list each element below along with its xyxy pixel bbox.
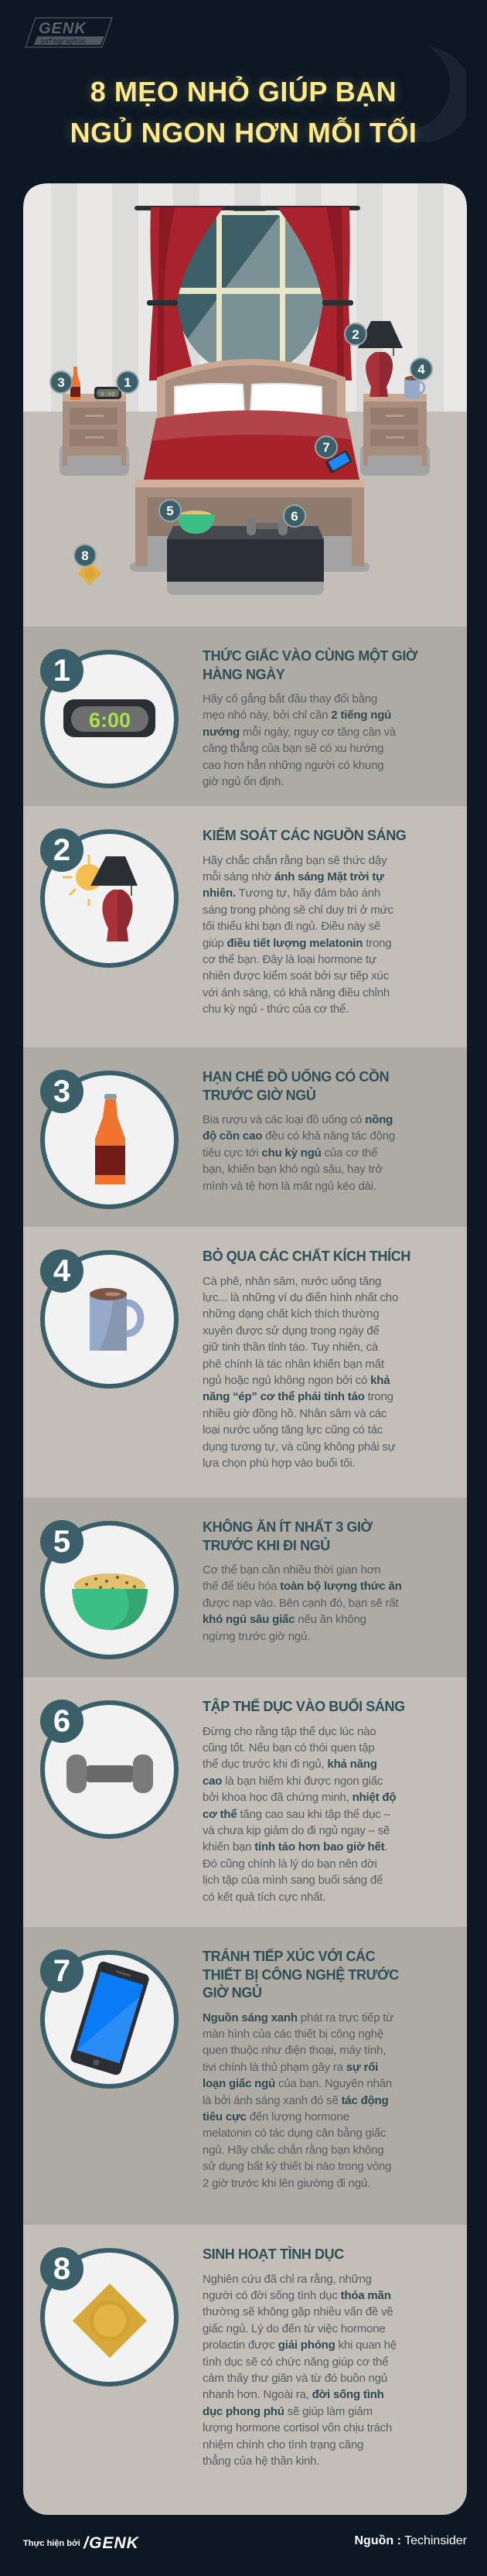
text: tip 7: tiêu cực đến lượng hormone bbox=[203, 2110, 349, 2123]
text: tip 2: chu kỳ ngủ - thức của cơ thể. bbox=[203, 1003, 349, 1016]
text: tip 7: melatonin có tác dụng cân bằng giấc bbox=[203, 2127, 386, 2140]
text: tip 2: nhiên. Tương tự, hãy đảm bảo ánh bbox=[203, 887, 380, 900]
text: tip 8: nhanh hơn. Ngoài ra, đời sống tình bbox=[203, 2388, 384, 2401]
icon: lamp bbox=[358, 321, 403, 397]
text: tip 5: TRƯỚC KHI ĐI NGỦ bbox=[203, 1538, 330, 1553]
text: tip 2: KIỂM SOÁT CÁC NGUỒN SÁNG bbox=[203, 828, 406, 843]
text: tip 4: nhiều giờ đồng hồ. Nhân sâm và các bbox=[203, 1407, 387, 1420]
text: tip 4: BỎ QUA CÁC CHẤT KÍCH THÍCH bbox=[203, 1249, 410, 1264]
icon: sun and lamp bbox=[40, 829, 179, 968]
number markers: 1 bbox=[124, 375, 131, 390]
text: tip 8: giấc ngủ. Lý do đến từ việc hormone bbox=[203, 2322, 386, 2335]
text: tip 5: KHÔNG ĂN ÍT NHẤT 3 GIỜ bbox=[203, 1519, 373, 1535]
logo: GENK infographic: GENK bbox=[39, 20, 87, 37]
text: tip 2: mỗi sáng nhờ ánh sáng Mặt trời tự bbox=[203, 870, 384, 883]
window bbox=[177, 210, 323, 363]
text: tip 8: thẳng của hệ thần kinh. bbox=[203, 2455, 319, 2468]
text: tip 7: TRÁNH TIẾP XÚC VỚI CÁC bbox=[203, 1949, 375, 1964]
panel: tip 1 bbox=[23, 627, 467, 806]
text: tip 7: là bởi ánh sáng xanh đó sẽ tác động bbox=[203, 2094, 388, 2107]
text: tip 7: tivi chính là thủ phạm gây ra sự rối bbox=[203, 2061, 378, 2074]
text: tip 6: Đó cũng chính là lý do bạn nên dời bbox=[203, 1857, 377, 1871]
footer: credit: Thực hiện bởi /GENK bbox=[23, 2534, 139, 2552]
text: tip 4: năng “ép” cơ thể phải tỉnh táo trong bbox=[203, 1390, 393, 1403]
icon: coffee mug bbox=[40, 1250, 179, 1389]
badge 7: 7 bbox=[53, 1954, 70, 1988]
text: tip 1: giờ ngủ ổn định. bbox=[203, 775, 284, 788]
number markers: 8 bbox=[81, 548, 89, 563]
text: tip 7: màn hình của các thiết bị công nghệ bbox=[203, 2028, 383, 2041]
text: tip 5: Cơ thể bạn cần nhiều thời gian hơn bbox=[203, 1563, 380, 1577]
text: tip 5: ngừng trước giờ ngủ. bbox=[203, 1630, 310, 1643]
text: tip 4: giữ tinh thần tỉnh táo. Tuy nhiên, cà bbox=[203, 1341, 378, 1354]
number markers: 2 bbox=[352, 327, 359, 342]
icon: phone small bbox=[325, 450, 352, 473]
title: NGỦ NGON HƠN MỖI TỐI bbox=[70, 117, 417, 149]
text: tip 1: căng thẳng của bạn sẽ có xu hướng bbox=[203, 742, 383, 755]
text: tip 1: Hãy cố gắng bắt đầu thay đổi bằng bbox=[203, 692, 377, 705]
text: tip 7: ngủ. Hãy chắc chắn rằng bạn không bbox=[203, 2144, 383, 2157]
icon: bottle small bbox=[70, 367, 80, 400]
icon: bottle bbox=[40, 1071, 179, 1209]
badge 5: 5 bbox=[53, 1525, 70, 1559]
panel: tip 5 bbox=[23, 1498, 467, 1677]
logo: GENK infographic: infographic bbox=[40, 38, 86, 46]
title: 8 MẸO NHỎ GIÚP BẠN bbox=[90, 76, 397, 108]
badge 6: 6 bbox=[53, 1704, 70, 1738]
text: tip 4: loại nước uống tăng lực cũng có tác bbox=[203, 1423, 383, 1437]
text: tip 3: TRƯỚC GIỜ NGỦ bbox=[203, 1088, 315, 1103]
bench bbox=[167, 526, 324, 595]
icon: mug small bbox=[404, 376, 424, 398]
badge 1: 1 bbox=[53, 654, 70, 688]
panel: tip 8 bbox=[23, 2225, 467, 2515]
text: tip 6: lịch tập của mình sang buổi sáng để bbox=[203, 1874, 383, 1887]
text: tip 8: dục phong phú sẽ giúp làm giảm bbox=[203, 2405, 373, 2418]
panel: tip 3 bbox=[23, 1047, 467, 1227]
panel: tip 7 bbox=[23, 1927, 467, 2225]
text: tip 8: thường sẽ không gặp nhiều vấn đề về bbox=[203, 2305, 393, 2318]
logo: GENK infographic bbox=[25, 17, 113, 48]
text: tip 8 bbox=[203, 2246, 397, 2468]
text: tip 6: và chưa kịp giảm do đi ngủ ngay – sẽ bbox=[203, 1824, 390, 1837]
text: tip 1: cao hơn hẳn những người có khung bbox=[203, 759, 383, 772]
text: tip 1: HÀNG NGÀY bbox=[203, 667, 284, 682]
icon: alarm clock 6:00 bbox=[40, 650, 179, 788]
text: tip 2: cơ thể bạn. Đây là loại hormone tự bbox=[203, 953, 376, 966]
text: tip 6: cơ thể tăng cao sau khi tập thể dục – bbox=[203, 1808, 390, 1821]
text: tip 6: cao là bạn hiếm khi được ngon giấc bbox=[203, 1775, 383, 1788]
text: tip 2: sáng trong phòng sẽ chỉ duy trì ở mức bbox=[203, 904, 393, 917]
text: tip 7: 2 giờ trước khi lên giường đi ngủ. bbox=[203, 2177, 370, 2190]
bed bbox=[130, 359, 370, 572]
icon: dumbbell bbox=[40, 1700, 179, 1839]
curtains bbox=[135, 206, 360, 381]
badge 5 bbox=[40, 1520, 83, 1563]
illustration: bedroom scene bbox=[23, 183, 467, 627]
badge 8 bbox=[40, 2247, 83, 2291]
text: tip 6: cũng tốt. Nếu bạn có thói quen tập bbox=[203, 1741, 375, 1754]
text: tip 1: mẹo nhỏ này, bởi chỉ cần 2 tiếng ngủ bbox=[203, 709, 391, 722]
text: tip 4: lực... là những ví dụ điển hình nhất cho bbox=[203, 1291, 398, 1304]
nightstand right bbox=[360, 394, 430, 476]
text: tip 6: có kết quả tích cực nhất. bbox=[203, 1891, 325, 1904]
text: tip 2: nhiên được kiểm soát bởi sự tiếp xúc bbox=[203, 969, 389, 982]
text: tip 3 bbox=[203, 1068, 395, 1193]
text: tip 6: khiến bạn tỉnh táo hơn bao giờ hết. bbox=[203, 1840, 387, 1853]
text: tip 8: lượng hormone cortisol vốn chịu trách bbox=[203, 2421, 392, 2434]
text: tip 8: cảm thấy thư giãn và từ đó buồn ngủ bbox=[203, 2372, 387, 2385]
text: tip 3: độ cồn cao đều có khả năng tác động bbox=[203, 1129, 395, 1143]
text: tip 3: tiêu cực tới chu kỳ ngủ của cơ thể bbox=[203, 1146, 377, 1160]
icon: crescent moon bbox=[393, 46, 466, 142]
text: tip 4: những dạng chất kích thích thường bbox=[203, 1307, 379, 1320]
text: tip 8: người có đời sống tình dục thỏa mãn bbox=[203, 2289, 391, 2302]
icon: smartphone bbox=[40, 1950, 179, 2089]
badge 4: 4 bbox=[53, 1254, 70, 1288]
badge 8: 8 bbox=[53, 2252, 70, 2286]
icon: alarm clock small: 9:00 bbox=[100, 391, 115, 398]
text: tip 6: TẬP THỂ DỤC VÀO BUỔI SÁNG bbox=[203, 1699, 405, 1714]
text: tip 2: Hãy chắc chắn rằng bạn sẽ thức dậy bbox=[203, 854, 387, 866]
text: tip 1: THỨC GIẤC VÀO CÙNG MỘT GIỜ bbox=[203, 648, 417, 664]
text: tip 4: lựa chọn phù hợp vào buổi tối. bbox=[203, 1457, 355, 1470]
text: tip 3: HẠN CHẾ ĐỒ UỐNG CÓ CỒN bbox=[203, 1069, 389, 1085]
panel: tip 4 bbox=[23, 1227, 467, 1498]
text: tip 1 bbox=[203, 647, 417, 788]
text: tip 5: khó ngủ sâu giấc nếu ăn không bbox=[203, 1613, 366, 1626]
text: tip 4: dụng tương tự, và cũng không phải sự bbox=[203, 1440, 396, 1454]
badge 2 bbox=[40, 828, 83, 872]
number markers: 3 bbox=[57, 375, 65, 390]
icon: condom packet bbox=[40, 2248, 179, 2386]
text: tip 7: Nguồn sáng xanh phát ra trực tiếp từ bbox=[203, 2011, 393, 2024]
text: tip 4: xuyên được sử dụng trong ngày để bbox=[203, 1324, 380, 1338]
text: tip 7: sử dụng bất kỳ thiết bị nào trong vòng bbox=[203, 2160, 391, 2173]
text: tip 8: tình dục sẽ có chức năng giúp cơ thể bbox=[203, 2356, 388, 2369]
text: tip 8: prolactin được giải phóng khi quan hệ bbox=[203, 2339, 397, 2352]
text: tip 7 bbox=[203, 1948, 399, 2190]
text: tip 4: Cà phê, nhân sâm, nước uống tăng bbox=[203, 1275, 381, 1287]
nightstand left bbox=[60, 394, 129, 476]
badge 3: 3 bbox=[53, 1074, 70, 1109]
icon: condom small bbox=[77, 561, 102, 586]
badge 3 bbox=[40, 1070, 83, 1113]
icon: alarm clock small bbox=[94, 387, 121, 399]
text: tip 2: giúp điều tiết lượng melatonin trong bbox=[203, 937, 391, 950]
text: tip 7: quen thuộc như điện thoại, máy tính, bbox=[203, 2044, 386, 2057]
icon: alarm clock 6:00: 6:00 bbox=[89, 709, 131, 732]
text: tip 5 bbox=[203, 1519, 402, 1643]
number markers: 7 bbox=[322, 440, 330, 455]
text: tip 1: nướng mỗi ngày, nguy cơ tăng cân và bbox=[203, 726, 396, 739]
panel: tip 6 bbox=[23, 1677, 467, 1927]
text: tip 2 bbox=[203, 827, 406, 1016]
footer: source: Nguồn : Techinsider bbox=[354, 2534, 467, 2547]
text: tip 3: bạn, khiến bạn khó ngủ sâu, hay trở bbox=[203, 1163, 383, 1176]
text: tip 8: nhiệm chính cho tình trạng căng bbox=[203, 2438, 363, 2451]
number markers: 4 bbox=[417, 362, 425, 377]
text: tip 8: Nghiên cứu đã chỉ ra rằng, những bbox=[203, 2273, 372, 2285]
text: tip 4 bbox=[203, 1248, 410, 1470]
text: tip 8: SINH HOẠT TÌNH DỤC bbox=[203, 2246, 344, 2262]
text: tip 2: với ánh sáng, có khả năng điều chỉnh bbox=[203, 986, 390, 999]
text: tip 3: mình và tệ hơn là mất ngủ kéo dài. bbox=[203, 1180, 376, 1193]
text: tip 3: Bia rượu và các loại đồ uống có nồng bbox=[203, 1113, 393, 1126]
text: tip 7: GIỜ NGỦ bbox=[203, 1985, 262, 2000]
badge 7 bbox=[40, 1949, 83, 1993]
text: tip 4: phê chính là tác nhân khiến bạn mất bbox=[203, 1358, 384, 1371]
icon: cereal bowl bbox=[40, 1521, 179, 1659]
icon: bowl small bbox=[177, 511, 215, 534]
text: tip 6: Đừng cho rằng tập thể dục lúc nào bbox=[203, 1725, 376, 1737]
text: tip 2: tối thiểu khi bạn đi ngủ. Điều này sẽ bbox=[203, 920, 380, 933]
badge 1 bbox=[40, 649, 83, 692]
text: tip 7: THIẾT BỊ CÔNG NGHỆ TRƯỚC bbox=[203, 1966, 399, 1982]
text: tip 6 bbox=[203, 1698, 405, 1904]
text: tip 6: bởi khoa học đã chứng minh, nhiệt độ bbox=[203, 1791, 396, 1804]
title bbox=[68, 76, 418, 149]
number markers bbox=[50, 323, 432, 566]
text: tip 5: thế để tiêu hóa toàn bộ lượng thức ăn bbox=[203, 1580, 402, 1593]
number markers: 5 bbox=[166, 504, 174, 518]
badge 2: 2 bbox=[53, 833, 70, 867]
number markers: 6 bbox=[291, 509, 298, 524]
badge 4 bbox=[40, 1249, 83, 1293]
icon: dumbbell small bbox=[247, 517, 288, 535]
text: tip 6: thể dục trước khi đi ngủ, khả năng bbox=[203, 1758, 377, 1771]
text: tip 7: loạn giấc ngủ của bạn. Nguyên nhân bbox=[203, 2077, 392, 2090]
panel: tip 2 bbox=[23, 806, 467, 1047]
badge 6 bbox=[40, 1700, 83, 1743]
text: tip 5: được nạp vào. Bên cạnh đó, bạn sẽ rất bbox=[203, 1597, 398, 1610]
text: tip 4: ngủ hoặc ngủ không ngon bởi có khả bbox=[203, 1374, 390, 1387]
